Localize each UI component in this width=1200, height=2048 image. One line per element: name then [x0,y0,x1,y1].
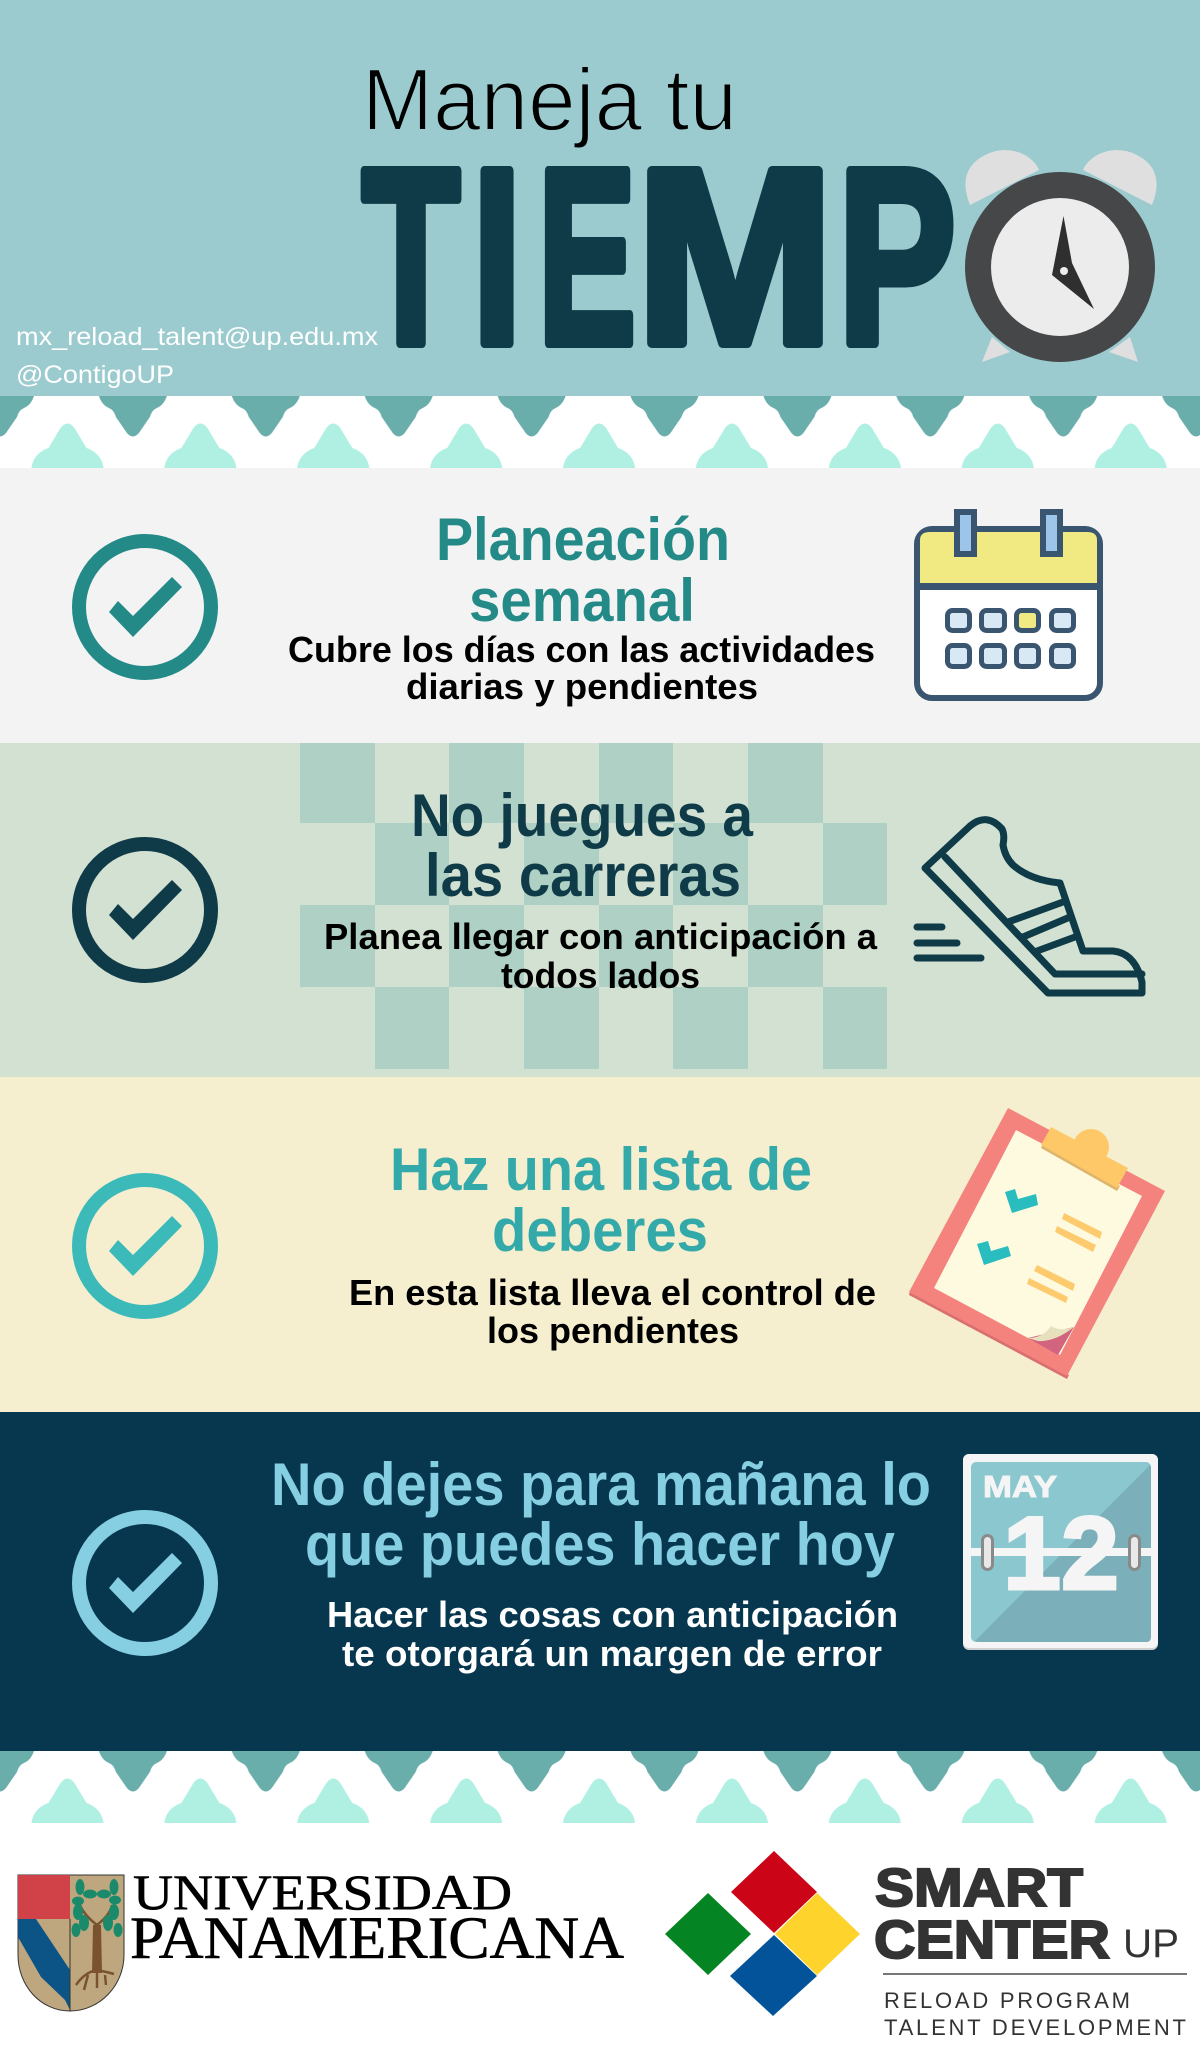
heading: Maneja tu: Maneja tu [362,50,737,149]
heading: Planeación [436,506,730,573]
heading: No dejes para mañana lo [271,1451,931,1518]
logo: Universidad Panamericana [18,1864,624,2011]
body text line 2: todos lados [501,955,700,996]
wordmark line 1: UNIVERSIDAD [133,1864,512,1920]
panel: Haz una lista de deberes [0,1077,1200,1412]
heading line 2: las carreras [425,842,741,909]
icon: check circle [79,1517,211,1649]
shield [18,1875,124,2011]
diamonds mark [665,1851,860,2016]
body text: Planea llegar con anticipación a [324,916,878,957]
body text line 2: te otorgará un margen de error [342,1633,882,1674]
wordmark: CENTER: CENTER [874,1910,1110,1970]
body text line 2: diarias y pendientes [406,666,758,707]
body text: En esta lista lleva el control de [349,1272,876,1313]
heading: Haz una lista de [390,1136,812,1203]
icon: alarm clock [965,150,1157,362]
icon: calendar [914,512,1103,698]
panel: No dejes para mañana [0,1412,1200,1751]
body text: Cubre los días con las actividades [288,629,875,670]
body text: Hacer las cosas con anticipación [327,1594,898,1635]
wordmark: SMART: SMART [875,1858,1083,1918]
tagline line 2: TALENT DEVELOPMENT [884,2015,1186,2040]
month label: MAY [983,1469,1057,1504]
checkerboard background [300,743,887,1069]
heading: Tiempo: E [538,117,636,396]
panel: header [0,0,1200,396]
panel: Planeación semanal [0,468,1200,743]
heading: Tiempo: I [472,117,522,396]
logo: Smart Center UP [665,1851,1187,2040]
heading line 2: semanal [469,567,695,634]
heading: Tiempo: M [636,117,834,396]
wordmark: UP: UP [1123,1922,1179,1966]
heading: Tiempo: P [838,117,956,396]
heading line 2: que puedes hacer hoy [305,1511,896,1578]
icon: running shoe [917,820,1142,993]
day number: 12 [1003,1496,1119,1612]
body text line 2: los pendientes [487,1310,739,1351]
wordmark line 2: PANAMERICANA [130,1905,624,1971]
icon: check circle [79,541,211,673]
decorative band: top pattern [0,396,1200,468]
heading line 2: deberes [492,1197,708,1264]
heading: No juegues a [411,782,754,849]
contact: email: mx_reload_talent@up.edu.mx [16,323,379,351]
heading: Tiempo: T [362,117,460,396]
icon: check circle [79,1180,211,1312]
icon: clipboard [909,1108,1165,1379]
decorative band: bottom pattern [0,1751,1200,1823]
tagline line 1: RELOAD PROGRAM [884,1988,1130,2013]
panel: No juegues a las carreras [0,743,1200,1077]
icon: check circle [79,844,211,976]
contact: handle: @ContigoUP [16,361,174,389]
icon: date calendar [963,1454,1158,1650]
